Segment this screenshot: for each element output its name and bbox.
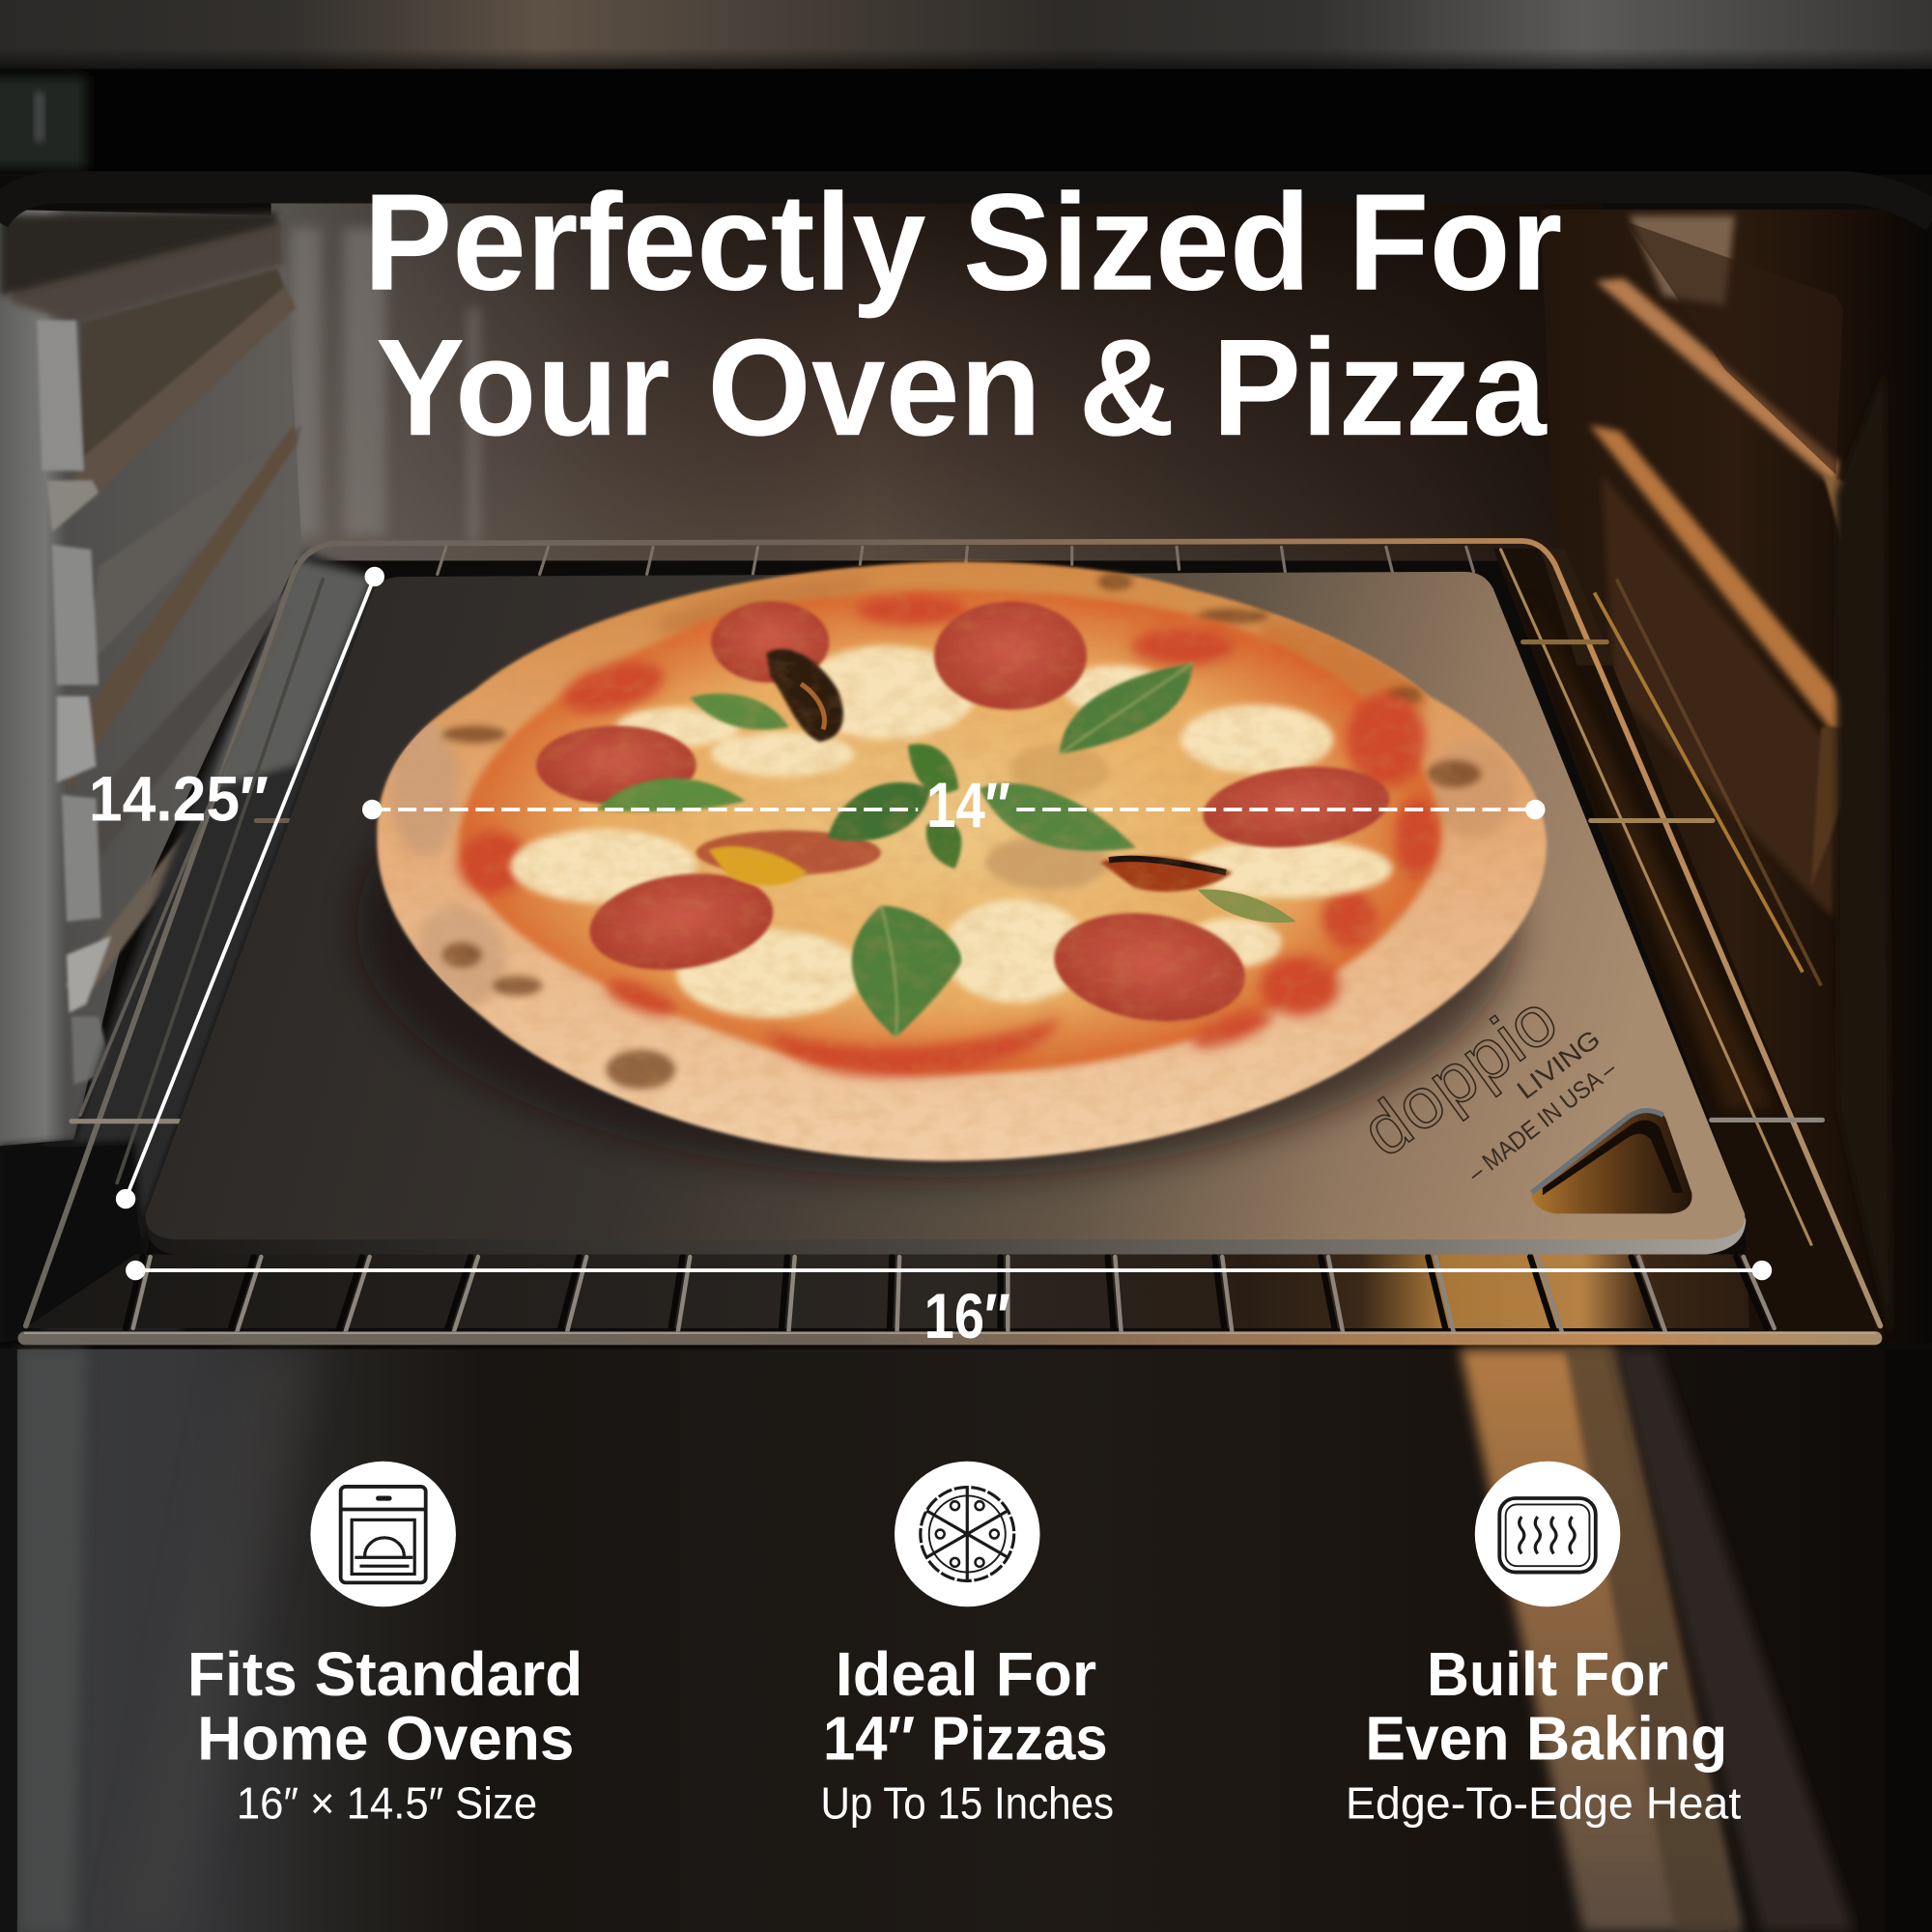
- wire oven rack: [25, 541, 1880, 1338]
- rack front bar: [25, 1333, 1875, 1344]
- feature: standard ovens: [187, 1462, 582, 1829]
- floor left reflection: [0, 1350, 323, 1932]
- basil leaves: [596, 663, 1193, 1037]
- dimension: 16 inch width: [126, 1261, 1772, 1352]
- tomato sauce patches: [458, 595, 1439, 1076]
- heading: Fits Standard: [187, 1639, 582, 1709]
- subheading: 16″ × 14.5″ Size: [237, 1778, 537, 1829]
- dimension: 14.25 inch depth: 14.25″: [89, 763, 269, 835]
- rack cross rods: [71, 642, 1822, 1122]
- dark space left of the steel: [0, 551, 380, 1343]
- crust toasted areas: [390, 564, 1516, 1021]
- dimension: 14.25 inch depth: [89, 567, 384, 1208]
- rack back wires: [438, 547, 1474, 574]
- steel front edge: [146, 863, 1746, 1254]
- sauce base: [458, 590, 1439, 1074]
- feature: even baking: Even Baking: [1365, 1703, 1727, 1773]
- lower oven floor: [0, 1350, 1932, 1932]
- oven top panel: [0, 0, 1932, 69]
- right oven wall: [1540, 210, 1932, 1343]
- oven cavity back wall: [271, 203, 1602, 560]
- rack front wires: [126, 1257, 1767, 1333]
- black recess and door gasket: [0, 69, 1932, 219]
- feature: 14 inch pizzas: 14″ Pizzas: [823, 1703, 1108, 1773]
- icon: heat tray: [1475, 1462, 1620, 1606]
- pizza steel sheet: [146, 572, 1746, 1254]
- subheading: Edge-To-Edge Heat: [1346, 1778, 1742, 1829]
- icon: pizza: [895, 1462, 1040, 1606]
- crust: [377, 561, 1547, 1161]
- engraved logo: doppio: [1347, 979, 1572, 1172]
- title: [363, 166, 1562, 465]
- rack side and back rails: [26, 541, 1880, 1325]
- title: Your Oven & Pizza: [376, 311, 1548, 465]
- warm light seen below the sheet: [25, 1254, 1879, 1328]
- dark space right of the steel: [1493, 549, 1886, 1337]
- left oven wall: [0, 210, 301, 1146]
- roasted peppers: [708, 649, 1296, 923]
- engraved logo: LIVING: [1512, 1024, 1605, 1105]
- pizza shadow on steel: [357, 671, 1516, 1177]
- pizza: [370, 554, 1552, 1171]
- dimension: 14 inch pizza: 14″: [926, 770, 1010, 841]
- crust char marks: [442, 573, 1481, 1090]
- handle cutout: [1531, 1109, 1691, 1213]
- heading: Ideal For: [836, 1639, 1096, 1709]
- left wall rack guides: [37, 269, 301, 1084]
- steel top surface: [146, 572, 1745, 1239]
- icon: oven: [310, 1462, 456, 1606]
- mottled baked texture: [370, 554, 1552, 1171]
- feature: standard ovens: Home Ovens: [197, 1703, 574, 1773]
- right wall warm highlights: [1589, 215, 1891, 1343]
- engraved logo: – MADE IN USA –: [1463, 1055, 1622, 1187]
- heading: Built For: [1427, 1639, 1668, 1709]
- feature: 14 inch pizzas: [820, 1462, 1114, 1829]
- feature: even baking: [1346, 1462, 1742, 1829]
- dimension: 14 inch pizza: [362, 770, 1545, 841]
- title: Perfectly Sized For: [363, 166, 1562, 320]
- subheading: Up To 15 Inches: [820, 1778, 1114, 1829]
- floor right warm streak: [1460, 1350, 1932, 1932]
- pepperoni slices: [536, 601, 1394, 1033]
- melted cheese: [510, 645, 1392, 1018]
- dimension: 16 inch width: 16″: [924, 1281, 1010, 1352]
